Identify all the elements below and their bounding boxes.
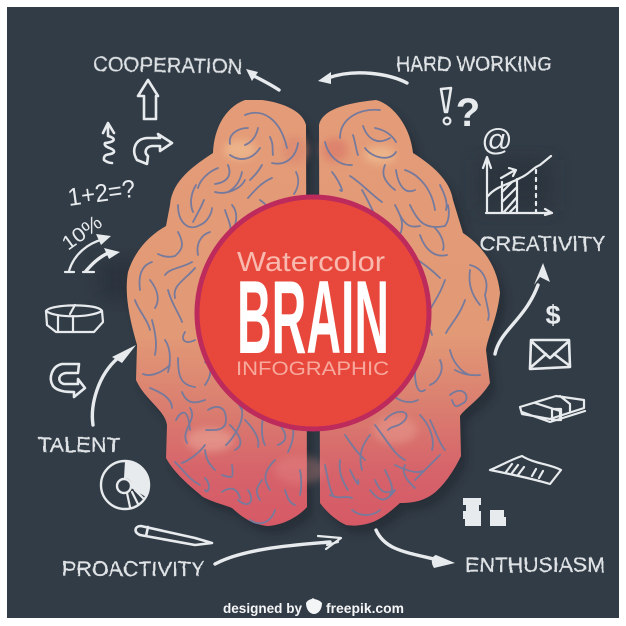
icon: coins (463, 498, 506, 526)
brain folds left (135, 113, 301, 523)
brain folds right (325, 110, 489, 515)
label: TALENT: TALENT (38, 434, 120, 457)
arrow: from proactivity (215, 536, 341, 564)
heading: INFOGRAPHIC: INFOGRAPHIC (236, 358, 389, 380)
footer: designed by freepik (223, 598, 404, 616)
title badge: BRAIN (237, 260, 389, 376)
icon: envelope (530, 340, 570, 369)
label: COOPERATION: COOPERATION (93, 53, 242, 79)
label: HARD WORKING: HARD WORKING (396, 53, 552, 76)
watercolor patches (186, 136, 417, 484)
icon: question mark: ? (456, 91, 480, 135)
brain left hemisphere (127, 100, 307, 526)
icon: wavy arrow (103, 123, 114, 163)
footer text left: designed by (223, 600, 302, 616)
icon: paper (490, 456, 561, 484)
icon: pencil (136, 526, 212, 545)
icon: pie box (46, 305, 103, 332)
icon: CD (101, 461, 149, 509)
arrow: to enthusiasm (376, 530, 455, 568)
brain (127, 100, 506, 534)
arrow: from hard working (318, 72, 407, 84)
text: 10%: 10% (58, 211, 107, 255)
red circle (197, 197, 429, 429)
footer text right: freepik.com (326, 600, 404, 616)
icon: up arrow (138, 80, 158, 119)
arrow: to cooperation (246, 69, 279, 90)
label: ENTHUSIASM: ENTHUSIASM (465, 554, 605, 577)
text: 1+2=?: 1+2=? (66, 175, 137, 212)
icon: money stack (520, 396, 585, 422)
label: PROACTIVITY: PROACTIVITY (62, 558, 205, 581)
brain right hemisphere (319, 100, 500, 526)
footer logo (306, 598, 322, 614)
icon: curved arrow (134, 134, 172, 164)
icon: exclamation mark (441, 88, 451, 124)
arrow: to creativity (495, 263, 550, 354)
heading: Watercolor: Watercolor (237, 246, 385, 277)
icon: dollar sign: $ (545, 300, 561, 330)
icon: growth chart (483, 156, 552, 215)
brain shadow (133, 108, 506, 534)
icon: G arrow (51, 364, 85, 397)
icon: at sign: @ (481, 122, 513, 157)
label: CREATIVITY: CREATIVITY (480, 233, 606, 256)
arrow: to talent (92, 345, 136, 425)
title badge (197, 197, 429, 429)
icon: percent arrows (65, 234, 120, 272)
